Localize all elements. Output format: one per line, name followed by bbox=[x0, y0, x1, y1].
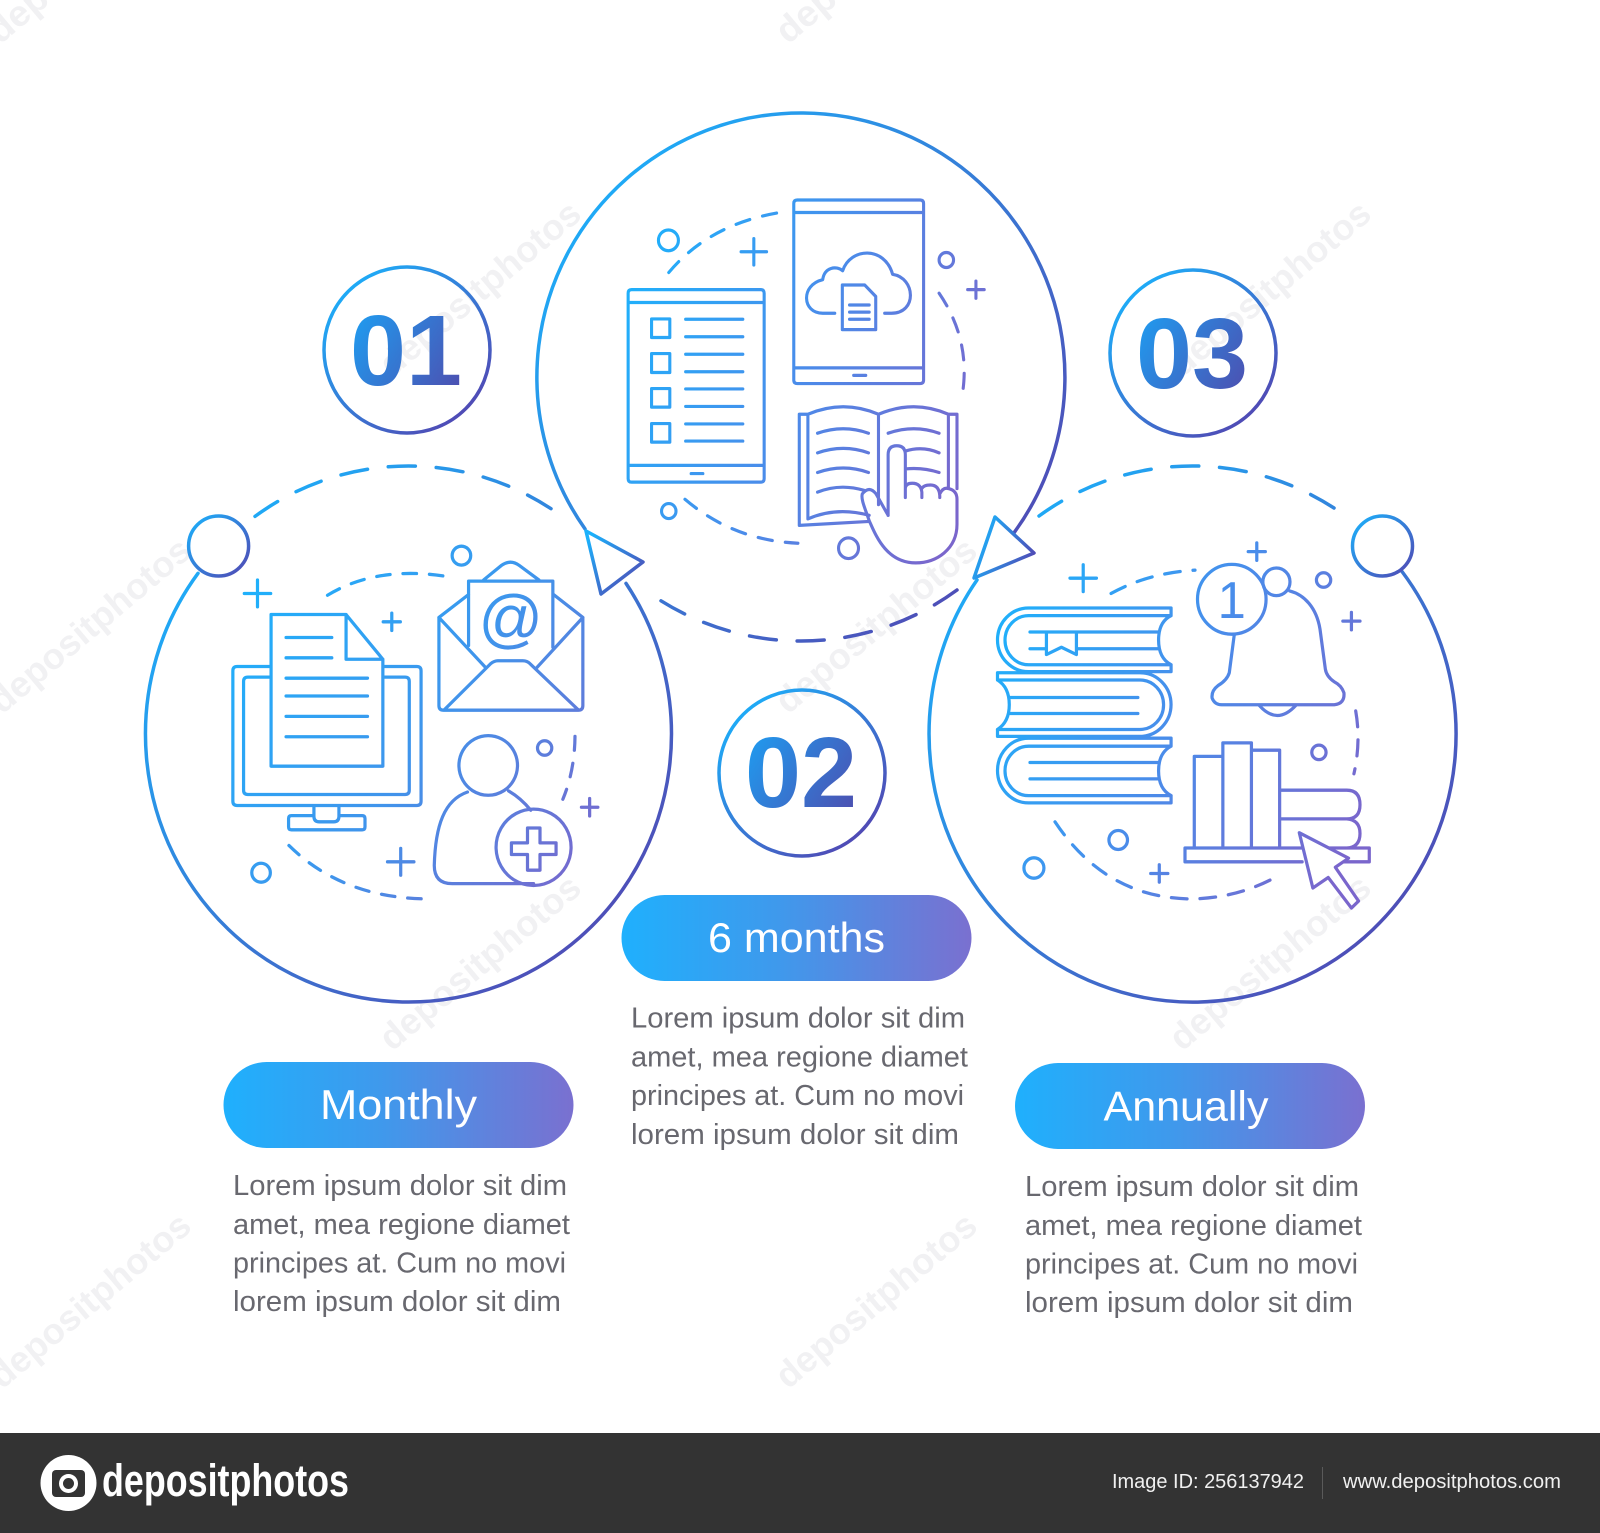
decorative plus marks bbox=[741, 239, 984, 298]
label pill: 6 months bbox=[622, 895, 972, 981]
watermark: depositphotos bbox=[767, 529, 985, 721]
number badge 02: 02 bbox=[745, 717, 857, 829]
decorative plus marks bbox=[1070, 543, 1360, 882]
icon: envelope bbox=[439, 562, 583, 710]
number badge 03: 03 bbox=[1136, 298, 1248, 410]
icon: document bbox=[271, 615, 383, 766]
text block: step 3 description: lorem ipsum dolor sit dim bbox=[1025, 1287, 1353, 1319]
text block: step 2 description: Lorem ipsum dolor sit dim bbox=[631, 1002, 965, 1034]
text block: step 3 description: amet, mea regione diamet bbox=[1025, 1210, 1362, 1242]
divider bbox=[1322, 1467, 1323, 1499]
footer bar bbox=[0, 1433, 1600, 1533]
small circles bbox=[1024, 573, 1331, 878]
watermark: depositphotos bbox=[1161, 866, 1379, 1058]
label pill: Annually: Annually bbox=[1104, 1082, 1268, 1130]
label pill: Annually bbox=[1015, 1063, 1365, 1149]
text block: step 1 description: lorem ipsum dolor sit dim bbox=[233, 1286, 561, 1318]
text block: step 1 description bbox=[233, 1170, 570, 1318]
icon: envelope: @ bbox=[478, 582, 543, 655]
small circles bbox=[252, 546, 552, 882]
inner dashed arcs bbox=[289, 573, 575, 899]
image id: Image ID: 256137942 bbox=[1112, 1471, 1304, 1493]
text block: step 2 description: amet, mea regione diamet bbox=[631, 1042, 968, 1074]
watermark: depositphotos bbox=[371, 192, 589, 384]
number badge 02 bbox=[719, 690, 885, 856]
number badge 01 bbox=[324, 267, 490, 433]
icon: add user bbox=[434, 736, 571, 885]
watermark: depositphotos bbox=[1161, 192, 1379, 384]
icon: monitor bbox=[233, 667, 421, 830]
watermark: depositphotos bbox=[371, 866, 589, 1058]
watermark bbox=[0, 0, 1379, 1396]
decorative plus and dot marks bbox=[244, 580, 598, 875]
inner dashed arcs bbox=[669, 212, 964, 543]
ring node: step 1 bbox=[189, 516, 249, 576]
inner dashed arcs bbox=[1055, 570, 1358, 899]
label pill: Monthly bbox=[224, 1062, 574, 1148]
arrow: step 1 to step 2 bbox=[586, 531, 643, 594]
text block: step 3 description: Lorem ipsum dolor sit dim bbox=[1025, 1171, 1359, 1203]
number badge 01: 01 bbox=[350, 295, 462, 407]
icon: bookshelf bbox=[1185, 743, 1369, 862]
small circles bbox=[658, 230, 954, 559]
logo wordmark: depositphotos bbox=[102, 1455, 349, 1506]
watermark: depositphotos bbox=[767, 1204, 985, 1396]
text block: step 3 description: principes at. Cum no movi bbox=[1025, 1248, 1358, 1280]
text block: step 2 description: principes at. Cum no movi bbox=[631, 1080, 964, 1112]
panel: step 3 icons bbox=[997, 543, 1369, 908]
arrow: step 2 to step 3 bbox=[974, 517, 1034, 578]
icon: cursor arrow bbox=[1299, 833, 1359, 908]
ring node: step 3 bbox=[1352, 516, 1412, 576]
text block: step 3 description bbox=[1025, 1171, 1362, 1319]
icon: notification bell bbox=[1197, 564, 1344, 715]
number badge 03 bbox=[1110, 270, 1276, 436]
label pill: 6 months: 6 months bbox=[708, 914, 885, 961]
icon: camera logo bbox=[40, 1455, 96, 1511]
icon: book stack bbox=[997, 608, 1171, 803]
text block: step 2 description bbox=[631, 1002, 968, 1151]
label pill: Monthly: Monthly bbox=[320, 1081, 477, 1128]
text block: step 1 description: Lorem ipsum dolor sit dim bbox=[233, 1170, 567, 1202]
icon: checklist tablet bbox=[628, 290, 764, 482]
icon: cloud tablet bbox=[794, 200, 924, 384]
website: www.depositphotos.com bbox=[1342, 1471, 1561, 1493]
icon: notification bell: 1 bbox=[1218, 572, 1246, 629]
text block: step 2 description: lorem ipsum dolor sit dim bbox=[631, 1119, 959, 1151]
panel: step 2 ring bbox=[537, 113, 1065, 641]
panel: step 1 ring bbox=[145, 466, 671, 1002]
icon: open book with hand bbox=[799, 407, 957, 563]
text block: step 1 description: principes at. Cum no movi bbox=[233, 1248, 566, 1280]
panel: step 3 ring bbox=[929, 466, 1456, 1002]
panel: step 2 icons bbox=[628, 200, 984, 563]
panel: step 1 icons bbox=[233, 546, 598, 899]
text block: step 1 description: amet, mea regione diamet bbox=[233, 1209, 570, 1241]
